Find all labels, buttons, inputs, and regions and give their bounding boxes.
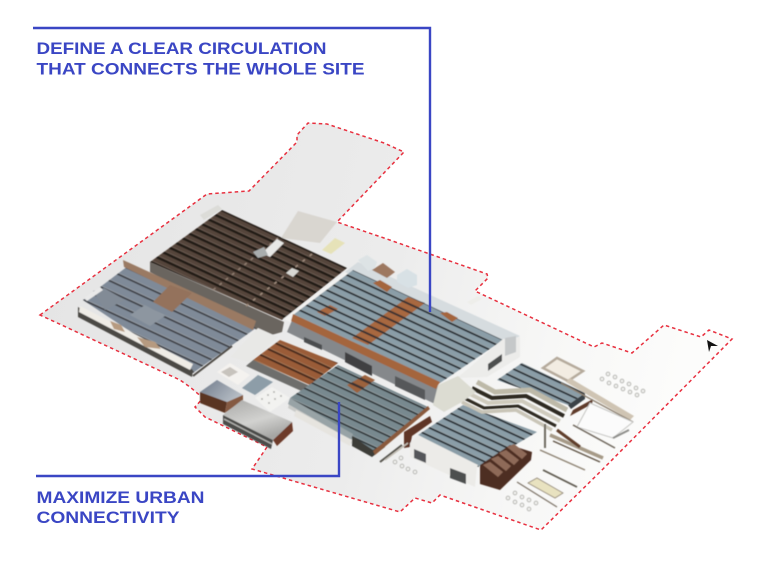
south grey roof building	[288, 365, 430, 457]
grey roof building west	[78, 260, 256, 377]
icon: north arrow	[707, 340, 718, 352]
small western buildings	[200, 363, 293, 449]
upper east grey roof building	[497, 363, 593, 416]
callout leader: urban connectivity	[36, 402, 339, 476]
rooftop boxes north of central building	[358, 255, 417, 288]
lower east grey roof building	[404, 405, 537, 490]
rust roof building	[246, 340, 338, 394]
heading: urban connectivity callout	[36, 488, 204, 527]
white block by rust roof	[230, 328, 278, 362]
planter dots	[393, 372, 645, 511]
heading: circulation callout: THAT CONNECTS THE WHOLE SITE	[36, 60, 364, 78]
site ground with dashed boundary	[40, 123, 732, 530]
zigzag bridge	[462, 382, 567, 448]
heading: urban connectivity callout: MAXIMIZE URBAN	[36, 488, 204, 507]
long white strip between buildings	[283, 266, 358, 322]
callout leader: circulation	[33, 28, 430, 312]
heading: circulation callout: DEFINE A CLEAR CIRCULATION	[36, 39, 326, 58]
junction structure	[433, 376, 476, 412]
eastern paths and landscape	[380, 296, 634, 507]
central grey roof building	[287, 262, 520, 405]
plaza slab north	[281, 211, 337, 243]
building complex	[78, 205, 645, 511]
dark brown roof building	[150, 205, 347, 336]
heading: circulation callout	[36, 39, 364, 78]
heading: urban connectivity callout: CONNECTIVITY	[36, 508, 180, 527]
yellow pad	[322, 238, 345, 254]
